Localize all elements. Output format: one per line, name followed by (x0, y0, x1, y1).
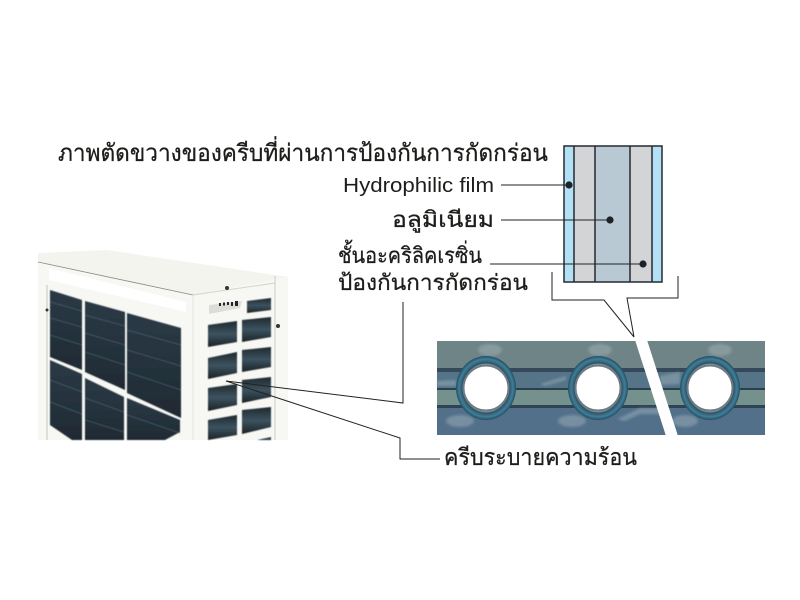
unit top lid (38, 250, 288, 295)
unit body (38, 262, 288, 440)
leader: aluminium (501, 216, 614, 224)
callout lines from the unit (226, 302, 440, 459)
front coil panels (50, 290, 181, 440)
label: aluminium: อลูมิเนียม (392, 207, 494, 233)
label: Hydrophilic film: Hydrophilic film (343, 175, 494, 197)
title: ภาพตัดขวางของครีบที่ผ่านการป้องกันการกัดกร่อน (58, 136, 548, 167)
label: heat-dissipating fin: ครีบระบายความร้อน (444, 444, 637, 470)
fin collars and holes (456, 356, 740, 420)
front white band (49, 268, 186, 312)
fin highlights (437, 344, 732, 427)
label: anti-corrosion acrylic resin layer: ชั้นอะคริลิคเรซิ่น (338, 240, 482, 268)
leader: acrylic resin (490, 260, 647, 268)
fin close-up photo (437, 340, 765, 436)
label: anti-corrosion acrylic resin layer (338, 240, 528, 295)
photo: outdoor air conditioner unit (38, 250, 288, 440)
bracket callout to fin photo (552, 272, 678, 337)
leader: Hydrophilic film (501, 181, 573, 189)
label: anti-corrosion acrylic resin layer: ป้องกันการกัดกร่อน (338, 270, 528, 295)
side vent (209, 301, 242, 314)
side coil openings (208, 298, 271, 440)
cross-section diagram (564, 146, 662, 282)
